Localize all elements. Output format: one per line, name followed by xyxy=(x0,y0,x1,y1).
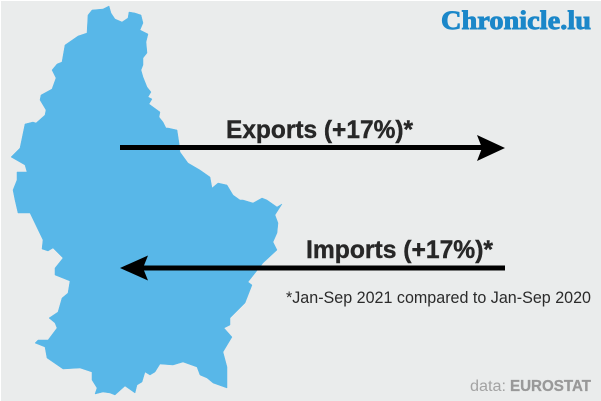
heading: imports: Imports (+17%)* xyxy=(306,236,493,264)
arrow: exports xyxy=(120,135,505,161)
source credit: data: xyxy=(470,378,506,395)
logo: Chronicle.lu: Chronicle.lu xyxy=(441,6,591,35)
source credit: EUROSTAT xyxy=(510,378,592,395)
footnote: *Jan-Sep 2021 compared to Jan-Sep 2020 xyxy=(286,289,591,307)
source credit xyxy=(470,378,592,395)
arrow: imports xyxy=(120,256,505,280)
heading: exports: Exports (+17%)* xyxy=(226,116,413,144)
map of Luxembourg xyxy=(11,6,282,395)
